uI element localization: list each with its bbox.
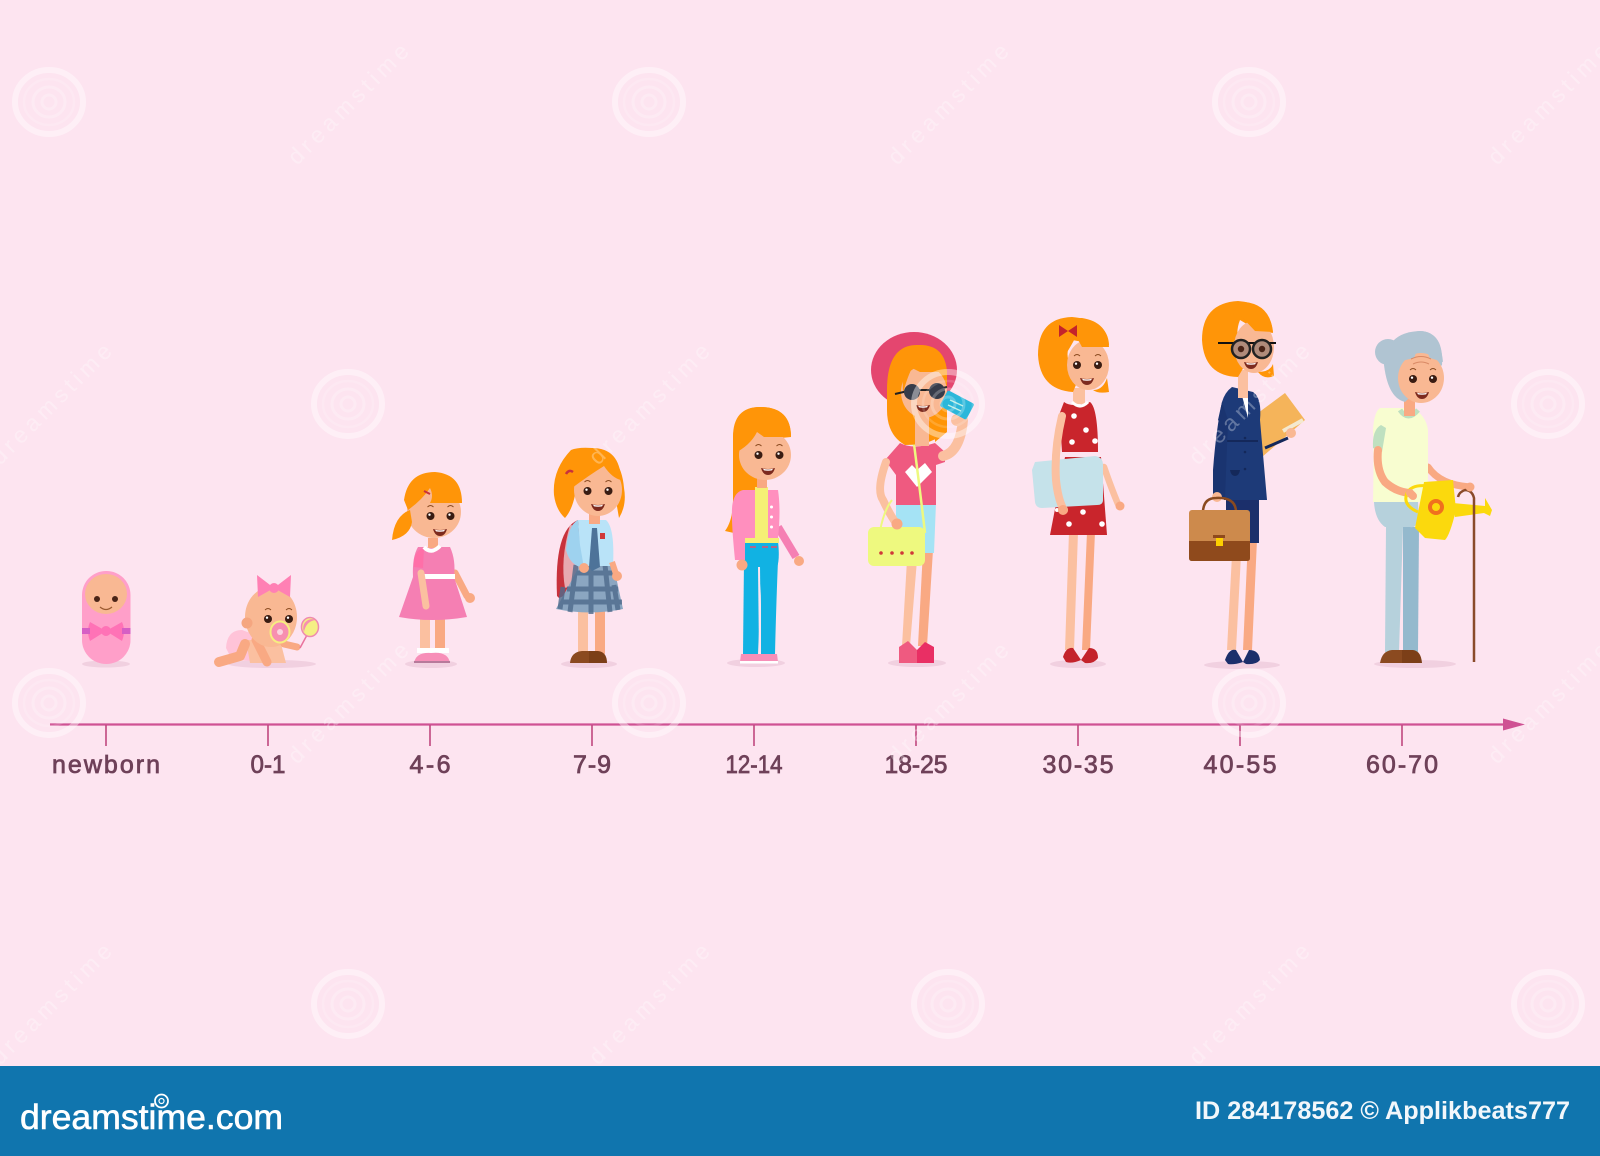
timeline axis: [50, 718, 1525, 746]
figure: teen girl aged 12-14: [725, 407, 804, 667]
axis label: 18-25: 18-25: [884, 751, 948, 779]
figure: crawling baby: [219, 575, 318, 668]
axis label: 12-14: 12-14: [726, 751, 783, 779]
figure: young woman aged 18-25: [868, 332, 974, 667]
watermark overlay: dreamstime: [282, 38, 414, 170]
figure: businesswoman aged 40-55: [1189, 301, 1305, 669]
axis label: 30-35: 30-35: [1042, 751, 1114, 779]
footer credit: ID 284178562 © Applikbeats777: [1195, 1097, 1570, 1125]
figure: elderly woman aged 60-70: [1373, 331, 1492, 668]
axis label: 40-55: 40-55: [1204, 751, 1276, 779]
figure: woman aged 30-35: [1032, 317, 1124, 668]
watermark overlay: dreamstime: [882, 38, 1014, 170]
watermark overlay: dreamstime: [882, 637, 1014, 769]
footer logo: dreamstime.com: [20, 1098, 283, 1137]
watermark overlay: dreamstime: [1183, 338, 1315, 470]
axis label: newborn: newborn: [52, 751, 160, 779]
axis label: 7-9: 7-9: [573, 751, 611, 779]
watermark overlay: dreamstime: [1183, 938, 1315, 1070]
axis label: 60-70: 60-70: [1366, 751, 1438, 779]
figure: newborn: [82, 571, 130, 668]
axis label: 0-1: 0-1: [250, 751, 286, 779]
footer bar: [0, 1066, 1600, 1156]
watermark overlay: dreamstime: [282, 637, 414, 769]
figure: schoolgirl aged 7-9: [554, 448, 625, 668]
figure: girl aged 4-6: [392, 472, 475, 668]
watermark overlay: dreamstime: [583, 938, 715, 1070]
axis label: 4-6: 4-6: [410, 751, 450, 779]
watermark overlay: dreamstime: [583, 338, 715, 470]
